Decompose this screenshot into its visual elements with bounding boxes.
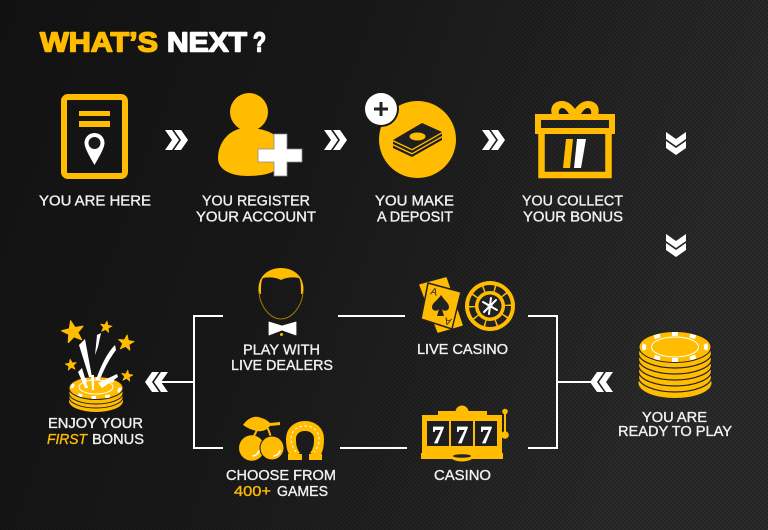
label: you register your account: YOUR ACCOUNT — [196, 210, 316, 226]
title: NEXT — [167, 26, 247, 58]
arrow: step 1 to step 2 — [165, 130, 188, 150]
arrow: bracket into first bonus — [145, 316, 223, 448]
label: enjoy your first bonus: ENJOY YOUR — [48, 416, 143, 432]
title — [40, 26, 266, 58]
label: you make a deposit — [375, 194, 454, 226]
label: play with live dealers — [231, 342, 333, 374]
title: WHAT’S — [40, 26, 158, 58]
icon: chip stack — [638, 332, 712, 398]
arrow: down chevrons upper — [666, 132, 686, 155]
label: you collect your bonus: YOU COLLECT — [522, 194, 623, 210]
label: you are here: YOU ARE HERE — [39, 194, 151, 210]
label: casino: CASINO — [434, 468, 491, 484]
label: enjoy your first bonus: FIRST — [47, 432, 88, 448]
label: live casino: LIVE CASINO — [417, 342, 508, 358]
icon: slot machine: 7 — [432, 423, 444, 449]
icon: slot machine — [421, 406, 509, 462]
label: you make a deposit: YOU MAKE — [375, 194, 454, 210]
icon: cards and roulette wheel — [420, 278, 515, 332]
connector: casino to games — [340, 447, 407, 449]
label: you make a deposit: A DEPOSIT — [377, 210, 453, 226]
label: play with live dealers: LIVE DEALERS — [231, 358, 333, 374]
connector: live casino to live dealers — [338, 315, 405, 317]
title: ? — [253, 26, 266, 58]
label: you collect your bonus — [522, 194, 623, 226]
icon: slot machine: 7 — [480, 423, 492, 449]
label: choose from 400+ games: GAMES — [277, 484, 328, 500]
icon: deposit money — [363, 91, 456, 178]
label: you register your account: YOU REGISTER — [202, 194, 310, 210]
icon: slot machine: 7 — [456, 423, 468, 449]
icon: cards and roulette wheel: A — [429, 286, 439, 299]
label: you are ready to play: YOU ARE — [642, 410, 707, 426]
icon: bonus chips with stars — [60, 318, 135, 412]
arrow: ready to play into bracket — [528, 316, 613, 448]
icon: cherries and horseshoe — [239, 417, 322, 461]
label: you register your account — [196, 194, 316, 226]
label: choose from 400+ games: 400+ — [234, 484, 271, 500]
icon: live dealer — [259, 268, 303, 336]
icon: cards and roulette wheel: A — [443, 314, 453, 327]
label: choose from 400+ games: CHOOSE FROM — [226, 468, 336, 484]
label: enjoy your first bonus: BONUS — [92, 432, 144, 448]
arrow: step 3 to step 4 — [482, 130, 505, 150]
label: choose from 400+ games — [226, 468, 336, 500]
label: play with live dealers: PLAY WITH — [243, 342, 320, 358]
label: enjoy your first bonus — [47, 416, 144, 448]
icon: gift box — [538, 101, 612, 175]
icon: user with plus — [218, 93, 302, 176]
label: you are ready to play — [618, 410, 732, 440]
label: you are ready to play: READY TO PLAY — [618, 424, 732, 440]
arrow: down chevrons lower — [666, 234, 686, 257]
icon: document with map pin — [64, 97, 125, 176]
arrow: step 2 to step 3 — [324, 130, 347, 150]
label: you collect your bonus: YOUR BONUS — [523, 210, 623, 226]
